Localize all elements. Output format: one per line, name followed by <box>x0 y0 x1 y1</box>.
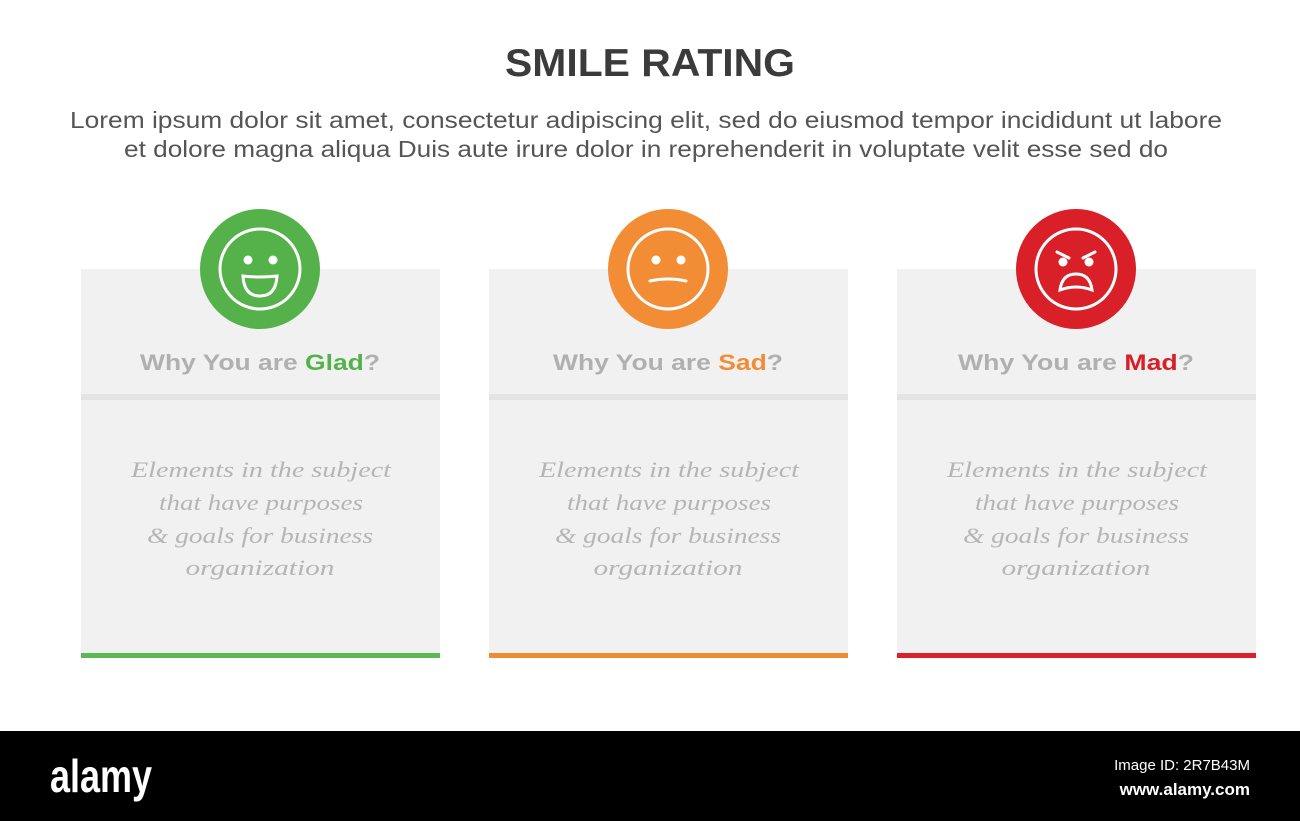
body text: sad <box>538 457 800 580</box>
subtitle text: et dolore magna aliqua Duis aute irure dolor in reprehenderit in voluptate velit esse sed do <box>124 136 1168 162</box>
body text: glad: & goals for business <box>147 523 373 548</box>
footer logo: alamy <box>50 750 152 802</box>
body text: sad: Elements in the subject <box>538 457 800 482</box>
footer id: Image ID: 2R7B43M <box>1114 757 1250 774</box>
panel: mad <box>897 209 1256 658</box>
body text: mad: & goals for business <box>963 523 1189 548</box>
heading: mad: Why You are Mad ? <box>958 350 1194 375</box>
subtitle text <box>70 107 1222 162</box>
subtitle text: Lorem ipsum dolor sit amet, consectetur adipiscing elit, sed do eiusmod tempor incididunt ut labore <box>70 107 1222 133</box>
title: SMILE RATING <box>505 42 795 85</box>
body text: glad: organization <box>186 555 334 580</box>
body text: mad: Elements in the subject <box>946 457 1208 482</box>
icon: angry face <box>1016 209 1136 329</box>
body text: glad <box>130 457 392 580</box>
body text: mad <box>946 457 1208 580</box>
body text: sad: that have purposes <box>567 490 771 515</box>
body text: mad: organization <box>1002 555 1150 580</box>
icon: happy face <box>200 209 320 329</box>
body text: sad: organization <box>594 555 742 580</box>
heading: glad: Why You are Glad ? <box>140 350 380 375</box>
body text: glad: Elements in the subject <box>130 457 392 482</box>
footer bar <box>0 731 1300 821</box>
heading: sad: Why You are Sad ? <box>553 350 783 375</box>
panel: glad <box>81 209 440 658</box>
icon: sad face <box>608 209 728 329</box>
body text: glad: that have purposes <box>159 490 363 515</box>
body text: sad: & goals for business <box>555 523 781 548</box>
footer url: www.alamy.com <box>1119 780 1250 799</box>
panel: sad <box>489 209 848 658</box>
body text: mad: that have purposes <box>975 490 1179 515</box>
